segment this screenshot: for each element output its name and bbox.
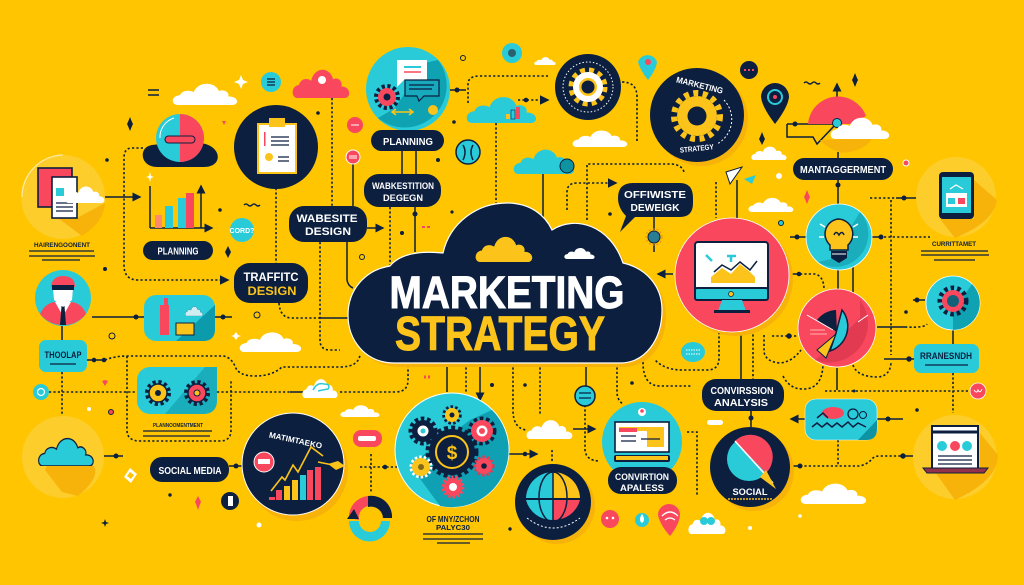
white cloud with teal scribble <box>302 379 338 398</box>
icon: paper planes <box>726 167 756 184</box>
icon: teal cloud with bars <box>467 97 536 123</box>
icon: small gizmo <box>646 229 662 245</box>
label: conversion analysis pill <box>702 379 784 411</box>
label: wabekestition pill: DEGEGN <box>383 193 423 204</box>
icon: small navy document <box>221 492 239 510</box>
icon: marketing strategy gear circle <box>650 68 748 166</box>
icon: cloud with circle <box>143 114 218 167</box>
icon: navy dots circle <box>740 61 758 79</box>
panel: planning chat circle <box>366 47 450 131</box>
icon: red cloud <box>293 70 349 98</box>
icon: growth chart circle: MATIMTAEKO <box>268 431 323 451</box>
icon: bar chart <box>150 186 212 228</box>
icon: teal cord badge <box>230 218 254 242</box>
title: marketing: MARKETING <box>390 267 624 318</box>
white cloud left of gears <box>340 405 379 417</box>
icon: pie chart circle <box>798 289 876 367</box>
decorative sparks and dots <box>87 56 919 531</box>
icon: teal drop circle <box>635 513 649 527</box>
white cloud left-mid <box>240 332 301 352</box>
panel: rranesndh teal label: RRANESNDH <box>920 351 972 361</box>
label: traffic design pill: DESIGN <box>248 284 296 298</box>
panel: gears dollar circle <box>395 393 509 507</box>
text: bottom caption: OF MNY/ZCHON <box>426 514 480 524</box>
icon: white cloud with teal badge <box>688 513 725 534</box>
label: management pill: MANTAGGERMENT <box>800 165 886 176</box>
icon: top teal pin <box>638 55 657 80</box>
text: bottom caption <box>423 514 483 543</box>
panel: thoolap teal label: THOOLAP <box>44 350 82 360</box>
label: traffic design pill <box>234 263 308 303</box>
icon: social gauge circle <box>710 427 794 511</box>
label: wabekestition pill <box>364 174 441 207</box>
icon: red dots circle <box>601 510 619 528</box>
icon: person <box>35 270 91 326</box>
label: planning pill center: PLANNING <box>383 137 433 148</box>
icon: small teal circle <box>261 72 281 92</box>
icon: document badge <box>21 155 105 239</box>
icon: gear teal circle <box>926 276 980 330</box>
panel: thoolap teal label <box>39 340 87 372</box>
label: conversion analysis pill: ANALYSIS <box>714 398 768 409</box>
label: offsite design bubble: OFFIWISTE <box>624 190 686 201</box>
icon: teal cord badge: CORD? <box>230 228 254 235</box>
label: social media pill <box>150 457 229 482</box>
text: gears caption: PLANNOOMENTMENT <box>153 423 204 429</box>
icon: white cloud lower right <box>801 484 866 504</box>
text: right caption: CURRITTAMET <box>932 242 976 248</box>
icon: teal cloud two <box>514 150 574 174</box>
label: planning pill <box>143 241 213 260</box>
label: offsite design bubble: DEWEIGK <box>630 203 680 214</box>
icon: small red face badge <box>970 383 986 399</box>
icon: yellow cloud <box>476 237 532 262</box>
text: bottom caption: PALYC30 <box>436 523 470 532</box>
icon: growth chart circle <box>242 413 348 521</box>
icon: clipboard circle <box>234 105 318 189</box>
icon: small navy teal circle <box>575 386 595 406</box>
connector network <box>49 76 970 495</box>
panel: teal line chart card <box>805 399 877 440</box>
icon: small red badge <box>347 117 363 133</box>
icon: laptop badge <box>913 415 998 500</box>
small white pill cloud <box>707 420 723 425</box>
icon: lightbulb circle <box>806 204 872 270</box>
white cloud bottom center <box>527 420 572 439</box>
text: left caption <box>29 243 95 260</box>
icon: gear circle <box>555 54 621 120</box>
label: conversion apaless pill <box>608 467 677 494</box>
panel: gears teal card <box>137 367 217 414</box>
icon: half circle with cloud <box>808 96 889 152</box>
label: website design pill: DESIGN <box>305 226 351 238</box>
label: planning pill center <box>371 130 444 151</box>
label: website design pill: WABESITE <box>296 213 358 225</box>
label: social media pill: SOCIAL MEDIA <box>158 466 222 477</box>
text: left caption: HAIRENGOONENT <box>34 243 90 249</box>
icon: white cloud <box>564 248 595 259</box>
icon: small red pin <box>346 150 360 164</box>
title: strategy: STRATEGY <box>395 308 605 361</box>
panel: teal bars card <box>144 295 215 341</box>
label: offsite design bubble <box>618 183 693 232</box>
icon: tablet badge <box>916 157 997 238</box>
icon: red wifi pin <box>658 504 680 536</box>
panel: rranesndh teal label <box>914 344 979 373</box>
icon: marketing strategy gear circle: MARKETING <box>675 74 725 96</box>
panel: laptop teal circle <box>602 402 682 482</box>
label: wabekestition pill: WABKESTITION <box>372 181 434 192</box>
icon: teal top circle <box>502 43 522 63</box>
main: marketing strategy cloud <box>348 203 666 367</box>
icon: small teal globe <box>456 140 480 164</box>
icon: location pin <box>761 83 789 124</box>
label: traffic design pill: TRAFFITC <box>244 270 299 284</box>
white cloud top-left <box>173 84 237 105</box>
icon: monitor circle <box>675 218 793 336</box>
icon: social gauge circle: SOCIAL <box>732 487 768 498</box>
white clouds near paper planes <box>749 147 793 212</box>
text: right caption <box>921 242 989 260</box>
text: gears caption <box>143 423 212 436</box>
label: management pill <box>793 158 893 180</box>
icon: small teal ring <box>33 384 49 400</box>
icon: red label pin <box>353 430 382 447</box>
label: website design pill <box>289 206 367 242</box>
icon: globe circle <box>515 464 595 544</box>
white cloud top center <box>534 57 556 65</box>
icon: marketing strategy gear circle: STRATEGY <box>679 142 714 155</box>
label: planning pill: PLANNING <box>158 246 199 258</box>
white cloud upper right of center <box>573 131 627 147</box>
label: conversion apaless pill: APALESS <box>620 483 664 493</box>
icon: cloud badge <box>22 416 104 498</box>
label: conversion analysis pill: CONVIRSSION <box>710 386 774 397</box>
icon: ring of arrows <box>347 496 392 542</box>
label: conversion apaless pill: CONVIRTION <box>615 472 669 482</box>
panel: gears dollar circle: $ <box>447 443 458 464</box>
icon: small teal ellipse <box>681 342 705 362</box>
